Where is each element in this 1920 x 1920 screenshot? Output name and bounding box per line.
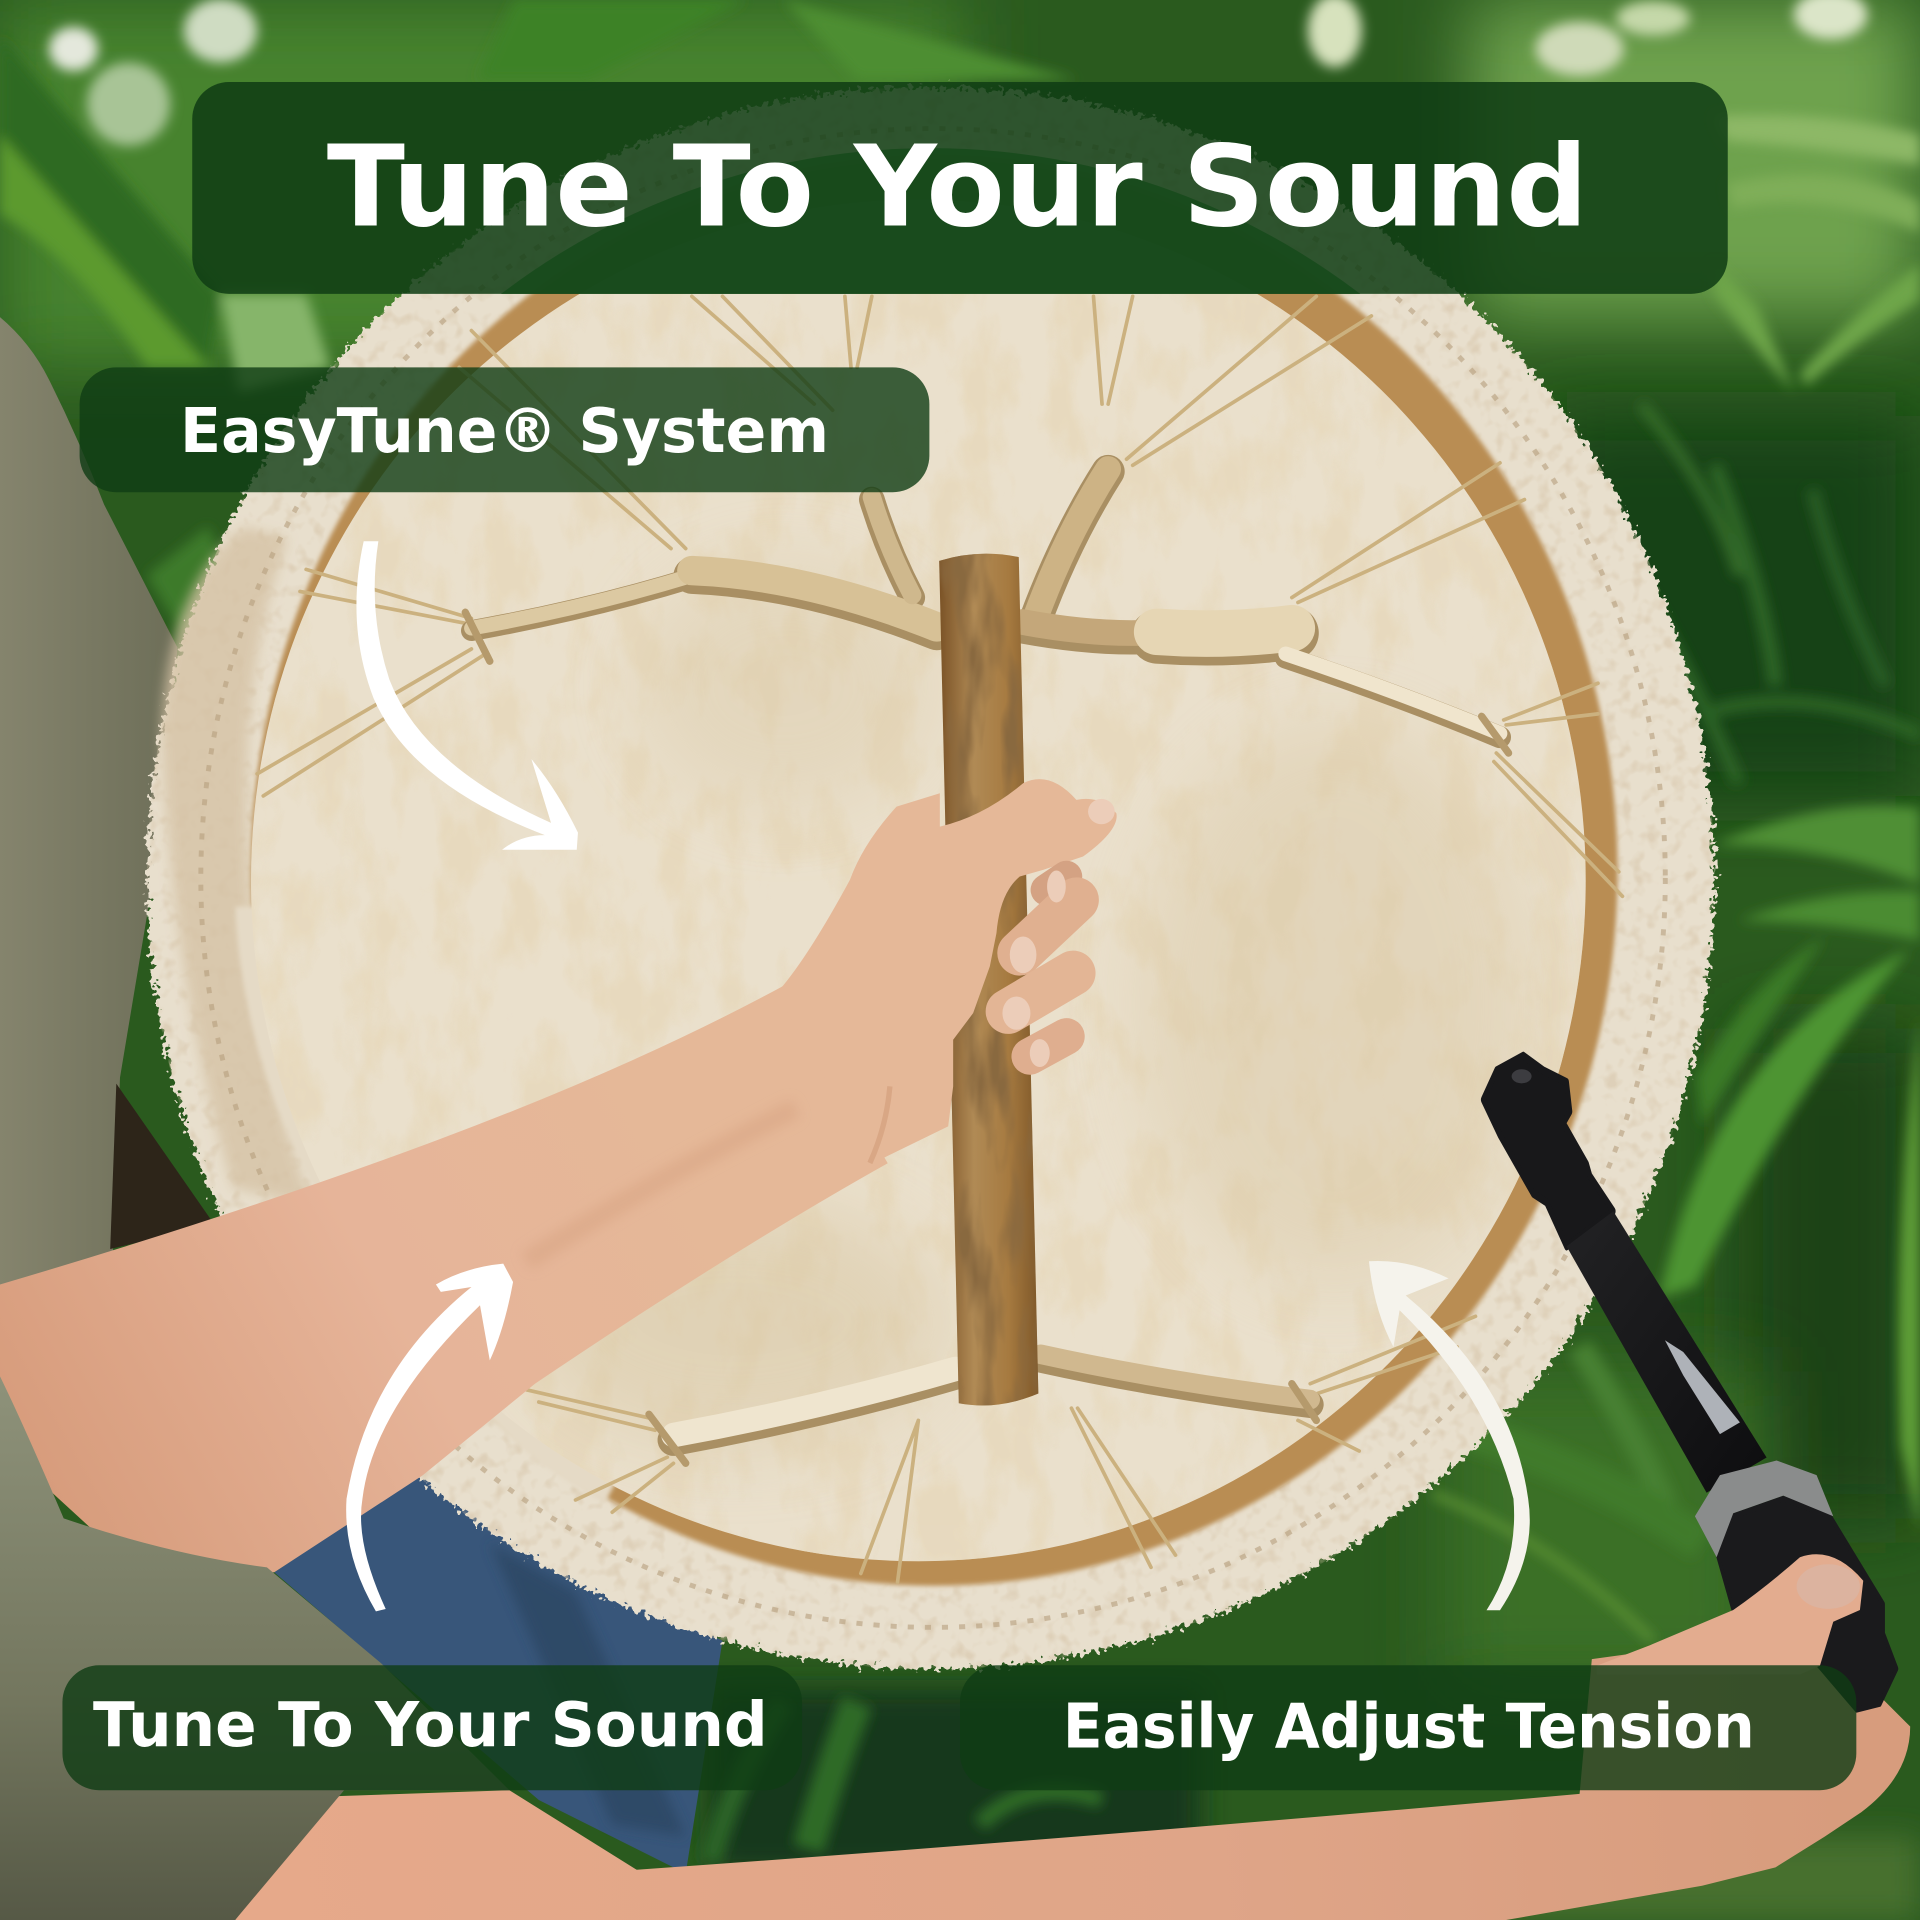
forearm tendon shading <box>527 1108 796 1261</box>
person's shirt, left side <box>0 317 178 1292</box>
label: EasyTune System <box>80 367 929 492</box>
hand: index fingertip <box>1046 877 1066 890</box>
arrow: from EasyTune label to drum head <box>356 541 578 850</box>
drum: inner wooden frame <box>251 156 1618 1586</box>
hand: little finger <box>1030 1036 1066 1056</box>
hand: middle finger <box>1020 900 1076 953</box>
label: Easily Adjust Tension <box>960 1665 1856 1790</box>
drum: fur texture <box>135 73 1727 1678</box>
arrow: from Tension label up to drum <box>1369 1261 1530 1610</box>
shirt sleeve, lower left <box>0 1376 509 1920</box>
drum: fur shading on left side <box>162 527 312 1206</box>
tool: grey ring <box>1695 1460 1833 1557</box>
hand gripping handle <box>777 779 1117 1163</box>
tool: highlight on socket <box>1512 1069 1532 1083</box>
hand: palm and thumb <box>777 779 1117 1163</box>
sinew lacing <box>257 296 1622 1582</box>
thumbnail <box>1797 1564 1860 1609</box>
sinew: wrapped straps <box>471 469 1500 1435</box>
label text: Tune To Your Sound: Tune To Your Sound <box>93 1690 768 1761</box>
handle: bark grain <box>940 554 1038 1406</box>
tuning tool <box>1483 1056 1897 1710</box>
label text: Easily Adjust Tension: Easily Adjust Tension <box>1063 1691 1755 1762</box>
title banner <box>192 82 1728 294</box>
sinew: thin cords <box>257 296 1622 1582</box>
label text: EasyTune System: EasyTune® System <box>180 396 829 467</box>
raised forearm <box>0 986 888 1580</box>
hand: fingernails <box>1002 799 1115 1067</box>
tool: white branding marks <box>1665 1340 1740 1434</box>
arrow: from Tune label up to drum <box>346 1264 513 1611</box>
title text: Tune To Your Sound <box>327 120 1588 252</box>
hand: wrist crease <box>870 1086 890 1163</box>
drum: fur rim <box>147 87 1714 1669</box>
shadow behind drum <box>110 1084 214 1249</box>
drum: skin head <box>251 200 1586 1561</box>
thumb over tool <box>1597 1554 1863 1675</box>
title banner: darker drum interior seen through the panel <box>501 148 1360 294</box>
drum: skin mottling <box>245 196 1592 1567</box>
drum: rim stitching <box>201 129 1665 1627</box>
jeans <box>274 1476 722 1873</box>
hand: ring finger <box>1008 973 1073 1011</box>
label: Tune To Your Sound <box>62 1665 802 1790</box>
lower arm and right hand <box>235 1629 1910 1920</box>
tool: socket head <box>1483 1056 1613 1246</box>
tool: black grip <box>1717 1499 1897 1710</box>
drum: fur folding over frame on lower left <box>251 906 612 1489</box>
sinew: strap shadows <box>471 471 1500 1440</box>
tool: long black handle <box>1567 1211 1767 1493</box>
drum <box>135 73 1727 1678</box>
sinew: knots <box>465 612 1509 1463</box>
wooden handle <box>939 554 1038 1406</box>
